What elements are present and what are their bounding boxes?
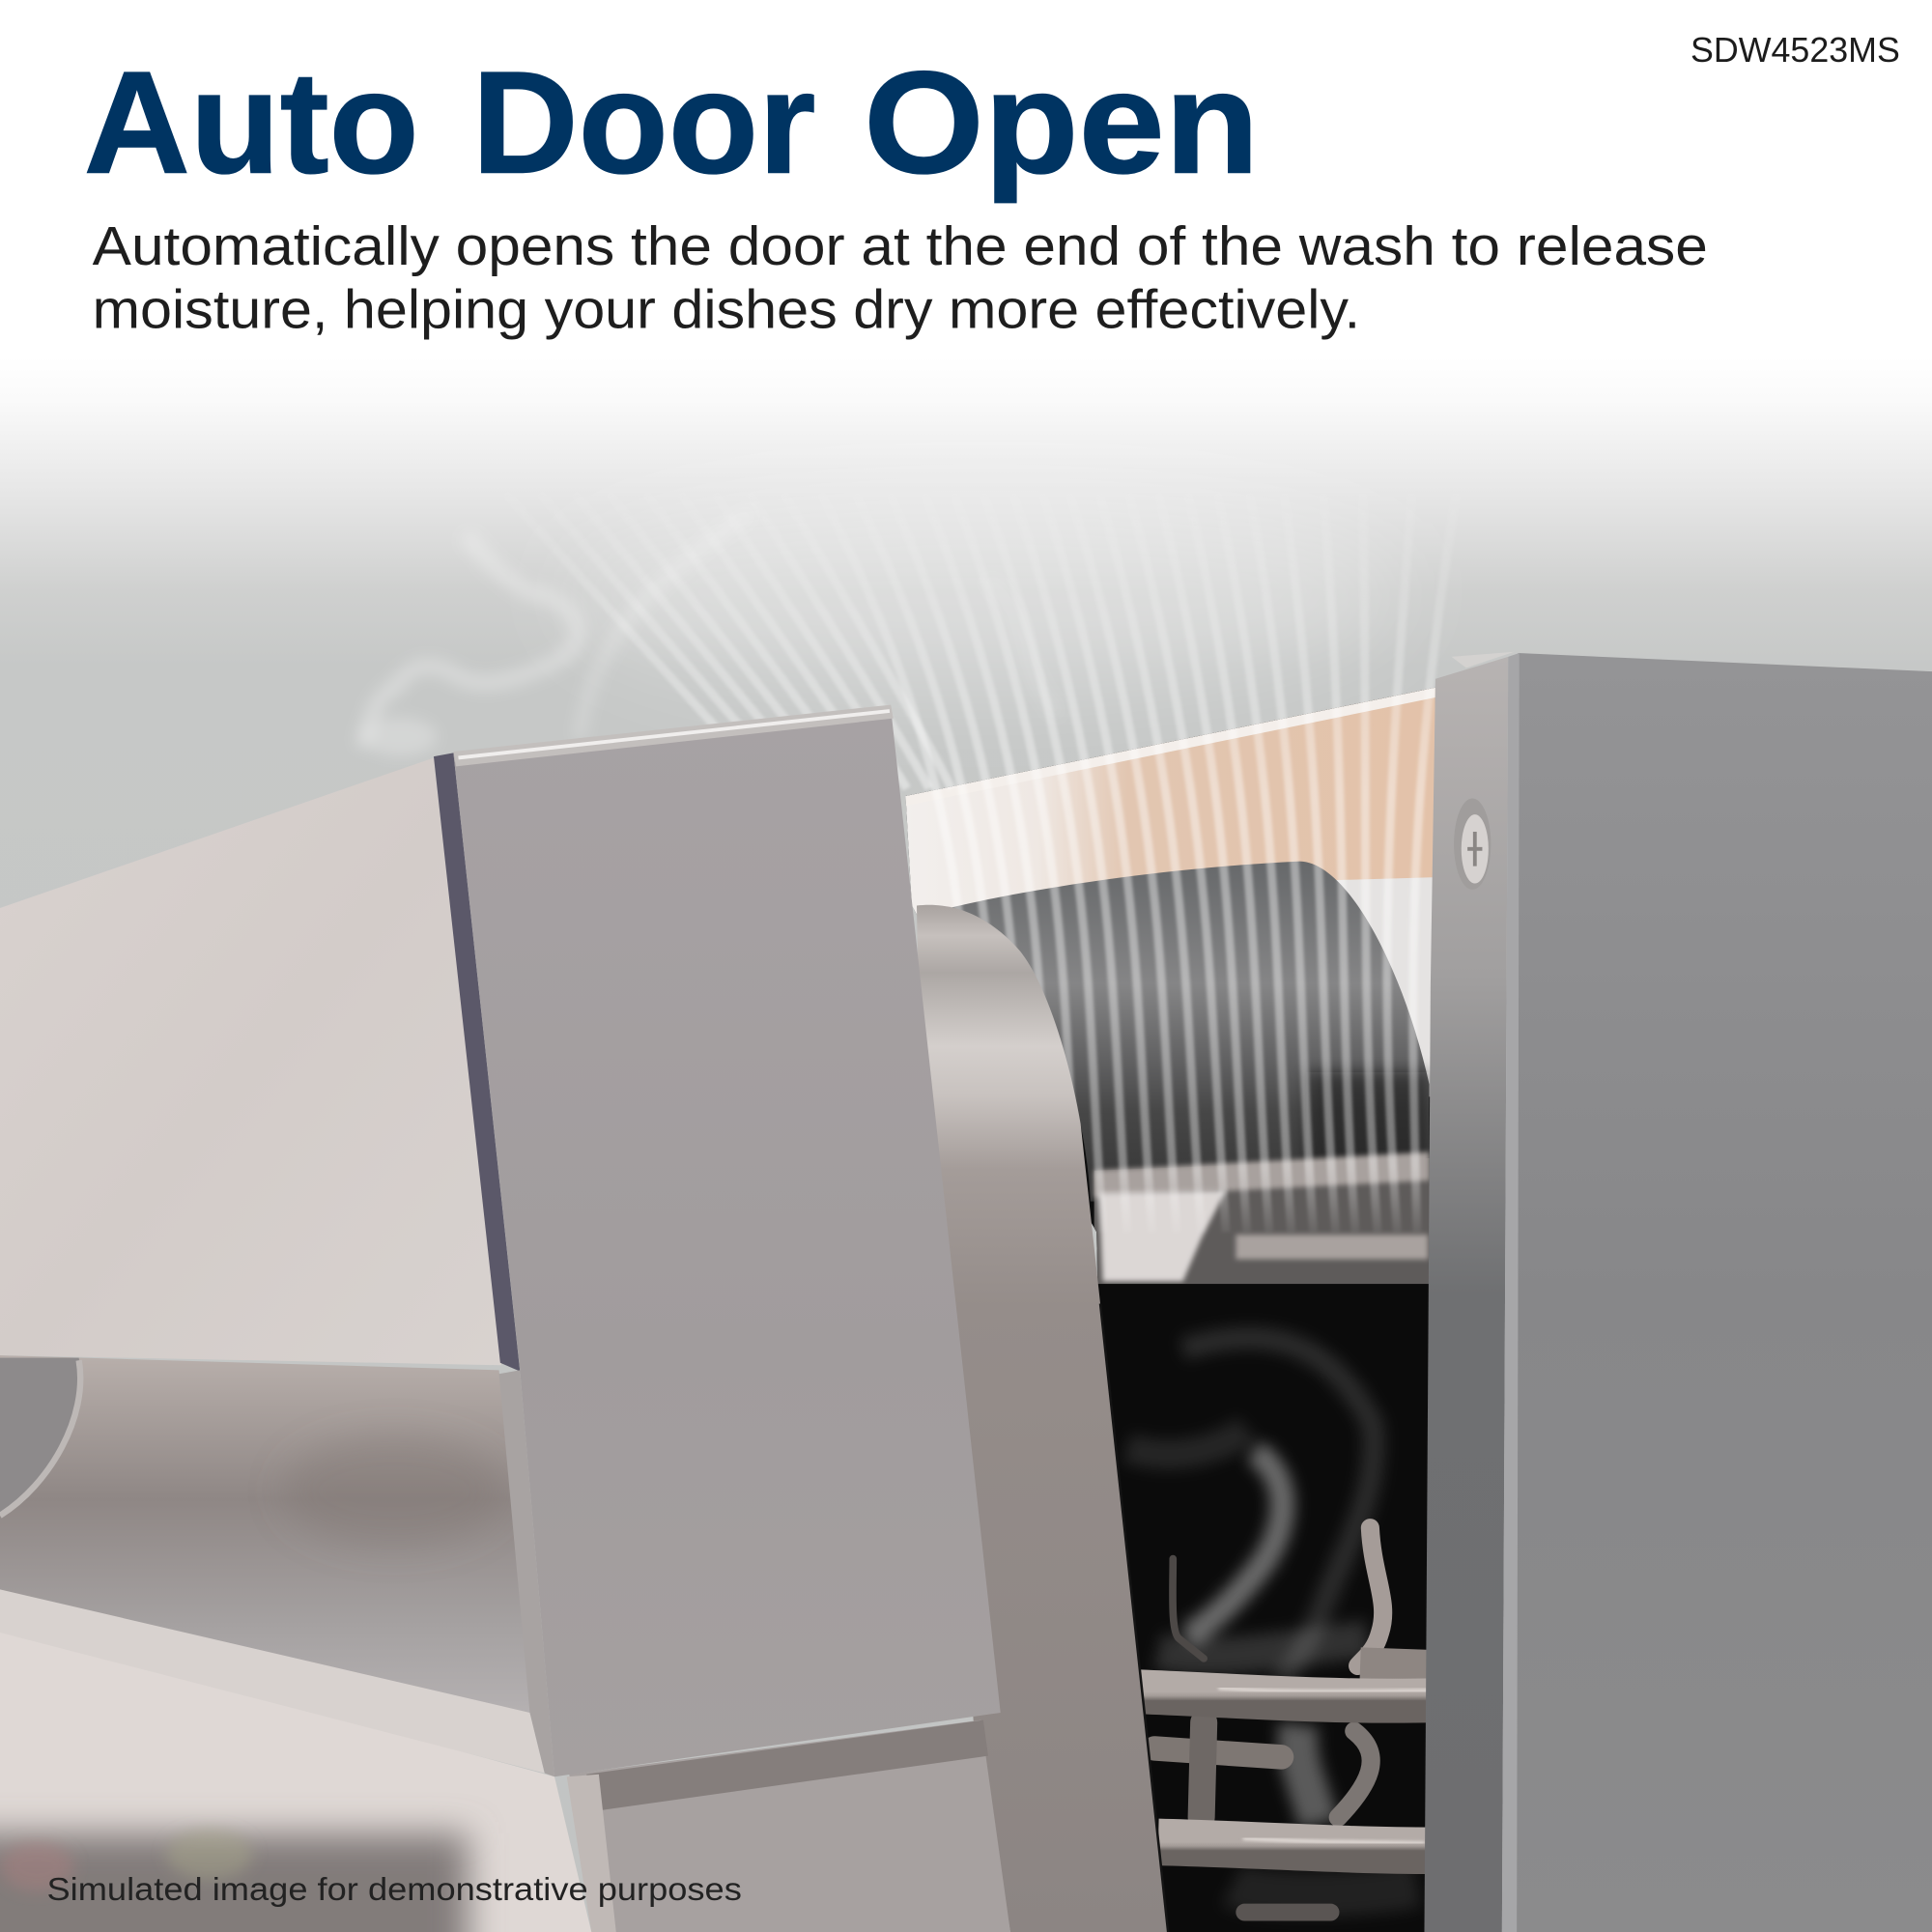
description: moisture, helping your dishes dry more effectively.	[93, 278, 1360, 339]
right cabinet	[1424, 652, 1932, 1932]
left door	[0, 705, 1010, 1932]
disclaimer: Simulated image for demonstrative purposes	[46, 1872, 742, 1908]
door end top highlight	[453, 705, 894, 766]
title: Door	[472, 42, 815, 204]
cabinet corner highlight	[1502, 653, 1520, 1932]
dish rack wires	[1140, 1528, 1435, 1913]
reflection in lower panel	[0, 1830, 469, 1932]
rack cross rod 2	[1154, 1748, 1282, 1757]
steam fan lines	[505, 493, 1457, 1233]
photo: dishwasher door ajar	[0, 493, 1932, 1932]
rack cross rod 1	[1140, 1691, 1435, 1701]
screw	[1454, 799, 1491, 890]
rack tine: tall	[1358, 1528, 1383, 1665]
rack tine: lower	[1338, 1731, 1371, 1817]
cabinet side flange	[1424, 657, 1508, 1932]
inner wood-toned tub wall	[906, 688, 1435, 1096]
dark curved inner door panel	[949, 862, 1430, 1202]
dark glass edge	[434, 753, 520, 1372]
rack bar	[1236, 1235, 1428, 1260]
recess round shape	[0, 1358, 80, 1516]
recess shading	[283, 1435, 505, 1547]
title: Open	[864, 42, 1260, 204]
upper rack band	[1094, 1158, 1430, 1288]
door end panel	[453, 708, 1001, 1776]
title: Auto	[84, 42, 419, 204]
description	[93, 215, 1708, 339]
steam haze	[567, 487, 1405, 696]
pale lip of the tub wall	[906, 688, 1435, 806]
title	[84, 42, 1260, 204]
rack tine: small dark	[1173, 1559, 1204, 1659]
rack cross rod 3	[1158, 1842, 1435, 1851]
door strip seam	[567, 1775, 616, 1932]
rack post	[1202, 1722, 1204, 1817]
cabinet front face	[1516, 653, 1932, 1932]
rack connector	[1360, 1663, 1430, 1665]
handle lower lip	[0, 1589, 545, 1773]
door edge inner dark sliver	[1100, 1303, 1168, 1932]
door lower reflective panel	[0, 1627, 591, 1932]
pale lower part of wall	[1337, 877, 1433, 1097]
dark lower cavity	[1097, 1284, 1429, 1288]
wispy smoke at left of the door	[362, 511, 1060, 756]
interior of dishwasher	[899, 678, 1441, 1932]
rising steam in cavity	[1127, 1338, 1417, 1894]
door lower stainless strip	[569, 1720, 1010, 1932]
door strip dark band	[586, 1720, 988, 1811]
rack lower stub	[1244, 1906, 1331, 1919]
curved stainless door edge	[917, 905, 1168, 1932]
door side strip	[499, 1370, 554, 1776]
pale tray	[1099, 1190, 1226, 1282]
cabinet top sliver	[1452, 652, 1515, 668]
description: Automatically opens the door at the end of the wash to release	[93, 215, 1708, 276]
dark shadow on right of panel	[1300, 1063, 1430, 1159]
model number: SDW4523MS	[1690, 31, 1900, 70]
handle recess	[0, 1355, 532, 1716]
door front face	[0, 757, 501, 1365]
